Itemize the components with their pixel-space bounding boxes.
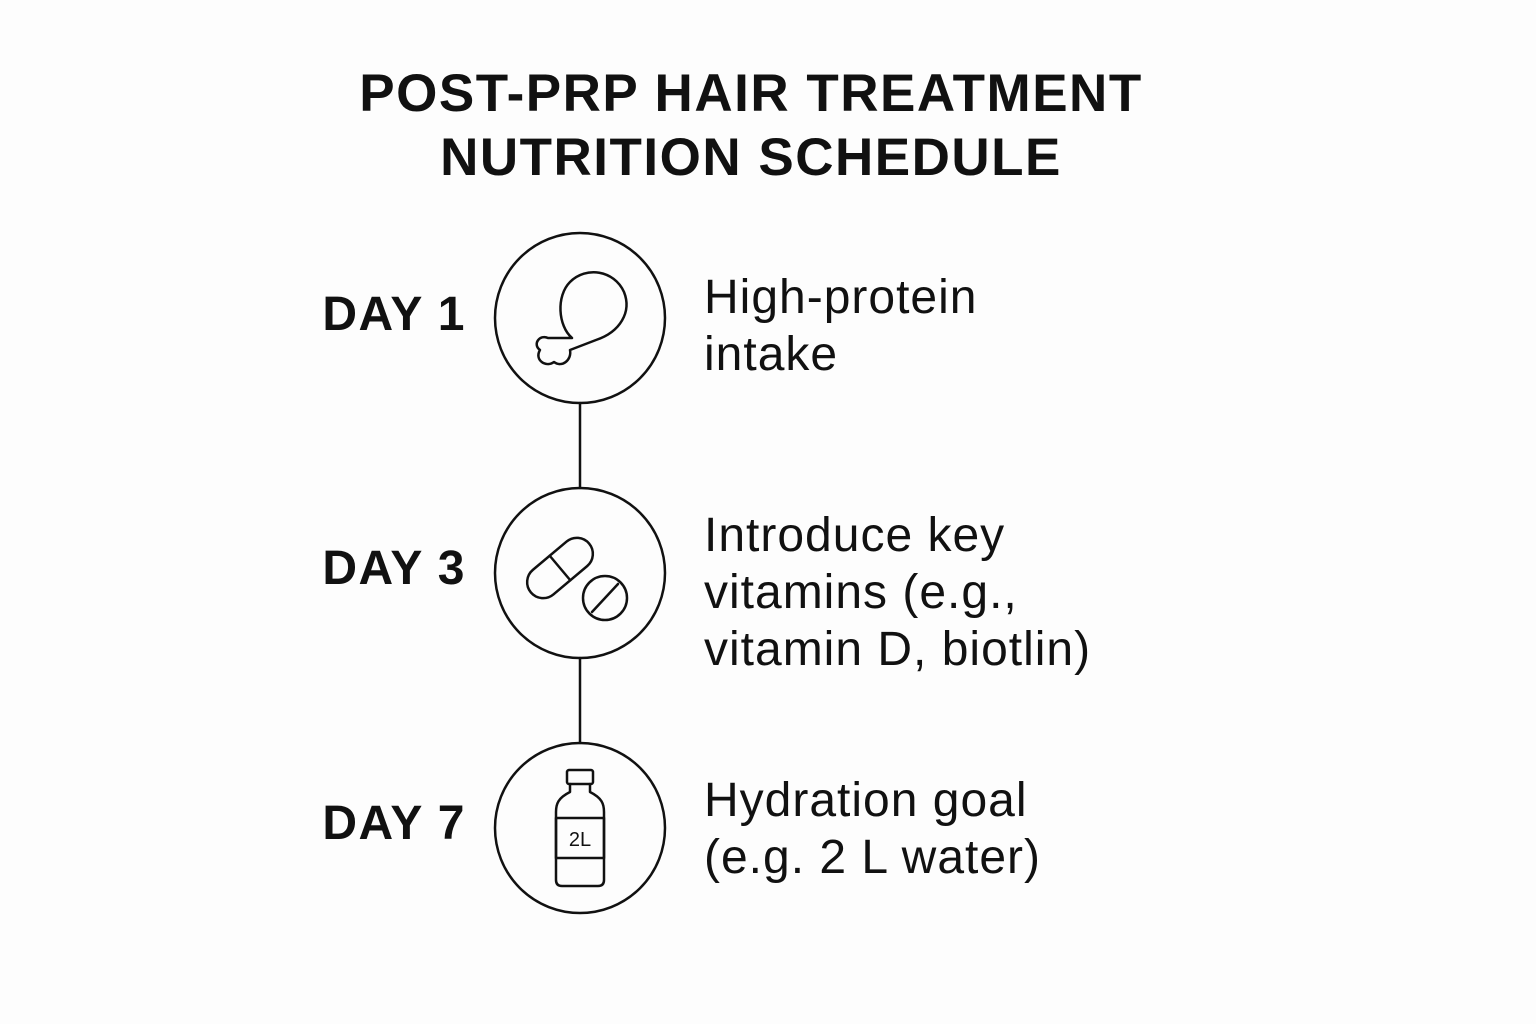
icon: capsule and pill — [495, 488, 665, 658]
day 1 label: DAY 1 — [322, 288, 466, 341]
day 3 text: vitamins (e.g., — [704, 566, 1018, 619]
title — [359, 64, 1143, 187]
title: NUTRITION SCHEDULE — [440, 128, 1062, 187]
title: POST-PRP HAIR TREATMENT — [359, 64, 1143, 123]
day 3 text: vitamin D, biotlin) — [704, 623, 1091, 676]
day 3 text — [704, 509, 1091, 676]
day 7 text — [704, 774, 1041, 884]
day 7 text: (e.g. 2 L water) — [704, 831, 1041, 884]
day 1 text: High-protein — [704, 271, 977, 324]
day 3 label: DAY 3 — [322, 542, 466, 595]
day 3 text: Introduce key — [704, 509, 1005, 562]
icon: water bottle: 2L — [569, 829, 591, 851]
day 7 label: DAY 7 — [322, 797, 466, 850]
day 1 text — [704, 271, 977, 381]
day 1 text: intake — [704, 328, 838, 381]
icon: drumstick — [495, 233, 665, 403]
icon: water bottle — [495, 743, 665, 913]
day 7 text: Hydration goal — [704, 774, 1028, 827]
